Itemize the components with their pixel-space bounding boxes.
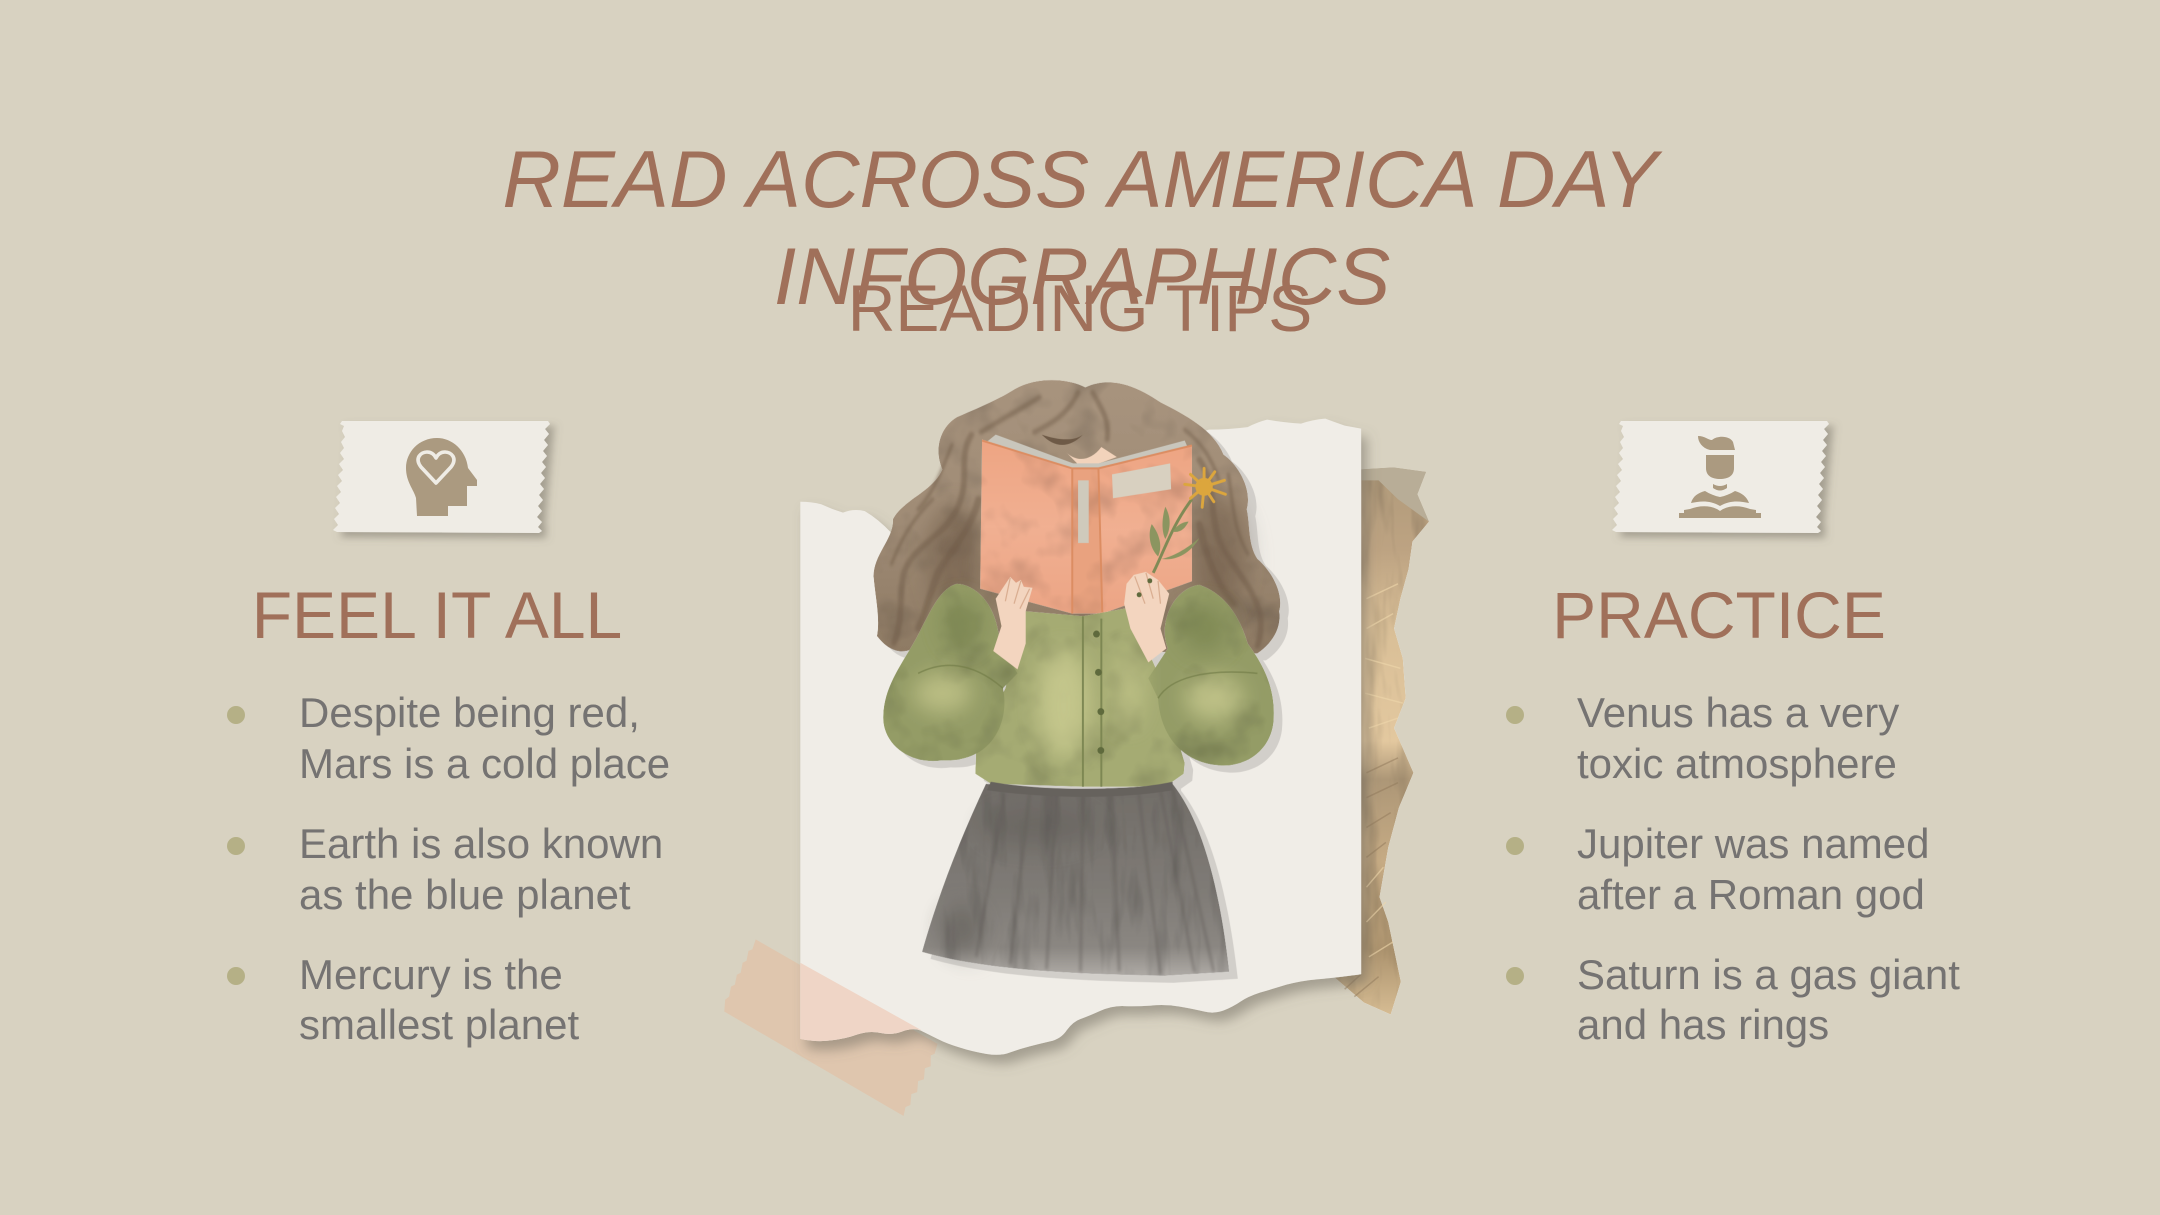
illustration: collage of girl reading <box>724 380 1429 1116</box>
tape overlap <box>800 963 922 1041</box>
title: READ ACROSS AMERICA DAY <box>502 135 1663 225</box>
list: practice: and has rings <box>1577 1001 1829 1048</box>
icon tag: person reading <box>1612 421 1829 533</box>
list: practice: Jupiter was named <box>1577 820 1930 867</box>
flower <box>1150 468 1225 573</box>
list: feel it all <box>227 689 670 1048</box>
list: feel it all: as the blue planet <box>299 871 631 918</box>
list: practice: toxic atmosphere <box>1577 740 1897 787</box>
sweater <box>883 584 1274 787</box>
list: practice: after a Roman god <box>1577 871 1925 918</box>
torn paper <box>800 419 1361 1055</box>
hair <box>874 380 1280 653</box>
panel: practice <box>1506 421 1960 1048</box>
list: practice <box>1506 689 1960 1048</box>
hands <box>993 572 1169 669</box>
washi tape <box>724 939 938 1116</box>
list: feel it all: Earth is also known <box>299 820 663 867</box>
heading: feel it all: FEEL IT ALL <box>252 578 622 652</box>
gold foil strip <box>1335 467 1429 1015</box>
panel: feel it all <box>227 421 670 1048</box>
skirt <box>922 782 1229 976</box>
list: feel it all: Mars is a cold place <box>299 740 670 787</box>
list: feel it all: Despite being red, <box>299 689 640 736</box>
book <box>980 435 1192 614</box>
icon tag: head with heart <box>333 421 550 533</box>
subtitle: READING TIPS <box>848 271 1312 345</box>
list: feel it all: Mercury is the <box>299 951 563 998</box>
title: INFOGRAPHICS <box>774 232 1390 322</box>
list: practice: Venus has a very <box>1577 689 1899 736</box>
heading: practice: PRACTICE <box>1552 578 1886 652</box>
list: practice: Saturn is a gas giant <box>1577 951 1960 998</box>
list: feel it all: smallest planet <box>299 1001 579 1048</box>
girl figure <box>874 380 1280 976</box>
